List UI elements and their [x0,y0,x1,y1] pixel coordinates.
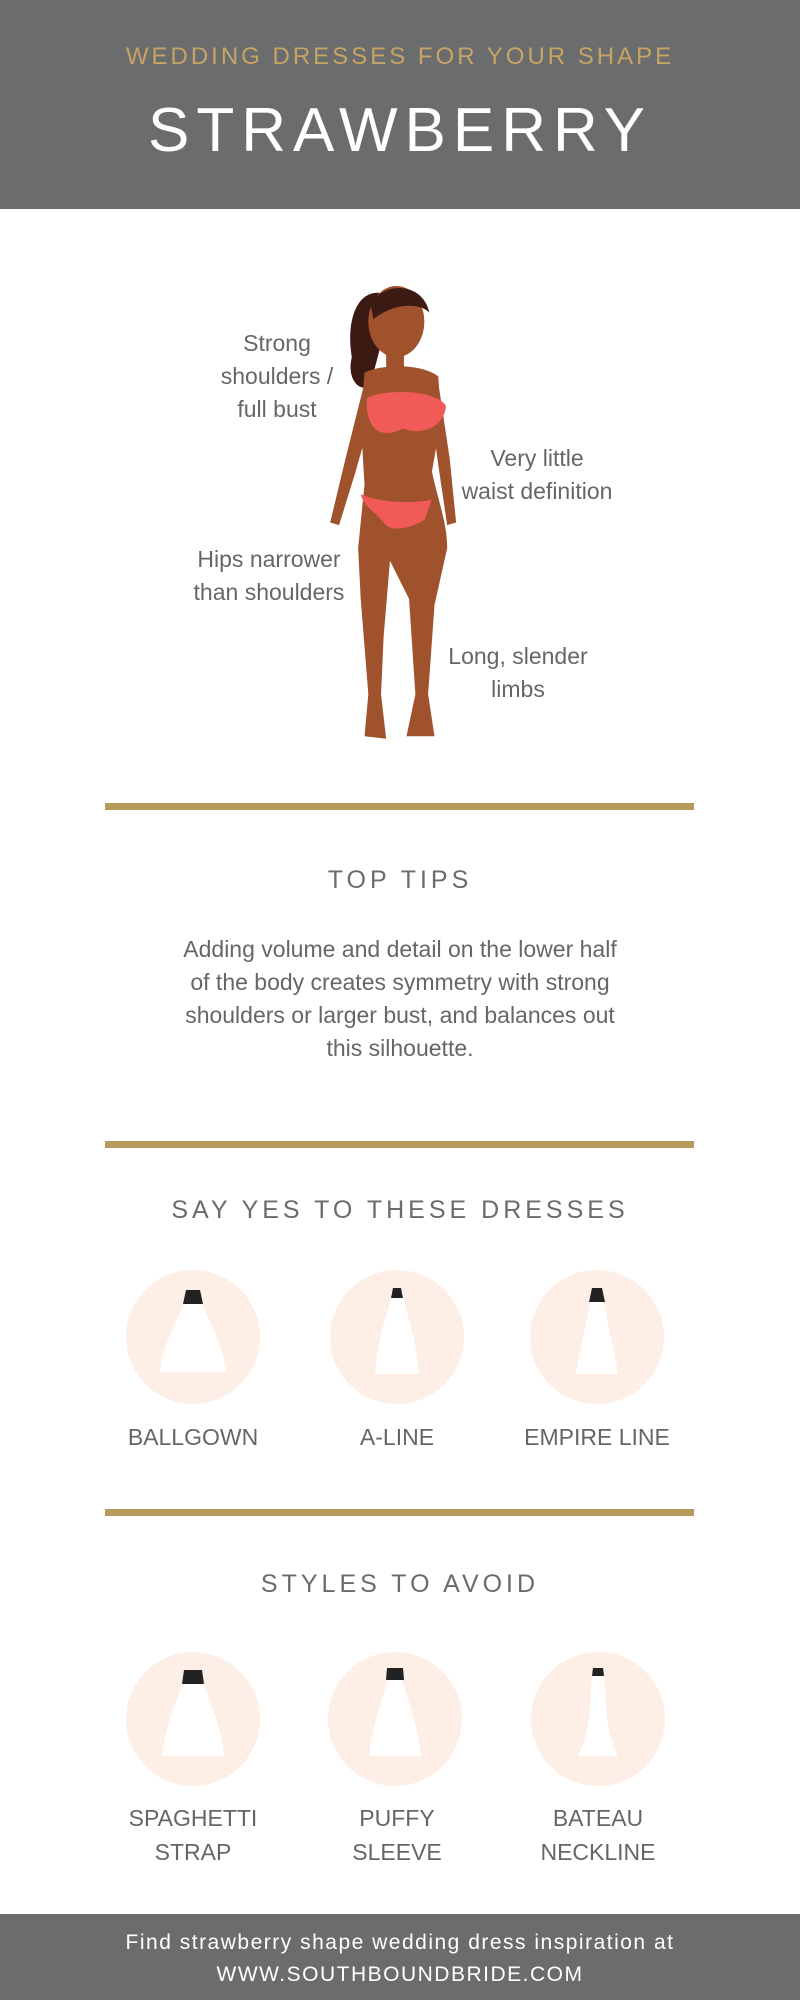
label: hips [194,546,344,605]
footer: Find strawberry shape wedding dress inspiration at [126,1931,674,1954]
label: limbs: Long, slender [448,643,588,669]
heading: top tips: TOP TIPS [328,866,472,894]
text: PUFFY [359,1805,435,1831]
subtitle: WEDDING DRESSES FOR YOUR SHAPE [126,43,674,70]
text: NECKLINE [540,1839,656,1865]
text: EMPIRE LINE [524,1424,670,1450]
header [0,0,800,209]
heading: say yes: SAY YES TO THESE DRESSES [171,1196,629,1224]
label: shoulders: Strong [243,330,311,356]
label: hips: than shoulders [194,579,344,605]
label: shoulders: shoulders / [221,363,333,389]
label: waist: Very little [490,445,584,471]
labels avoid [129,1805,257,1865]
label: waist [462,445,612,504]
dress: empire [530,1270,664,1404]
label: limbs: limbs [491,676,545,702]
text: SLEEVE [352,1839,442,1865]
dress: spaghetti [126,1652,260,1786]
label: waist: waist definition [462,478,612,504]
figure illustration [330,286,456,739]
dress: a-line [330,1270,464,1404]
labels avoid: STRAP [155,1839,231,1865]
label: hips: Hips narrower [197,546,341,572]
labels avoid: SPAGHETTI [129,1805,257,1831]
text: A-LINE [360,1424,434,1450]
footer: WWW.SOUTHBOUNDBRIDE.COM [216,1963,583,1986]
dress: puffy [328,1652,462,1786]
label: shoulders [221,330,334,422]
text: BATEAU [553,1805,643,1831]
tips text: Adding volume and detail on the lower half of the body creates symmetry with strong shoulders or larger bust, and balances out this silhouette. [183,936,617,1061]
labels say yes: BALLGOWN [128,1424,258,1450]
heading: avoid: STYLES TO AVOID [261,1570,539,1598]
footer [0,1914,800,2000]
label: shoulders: full bust [237,396,317,422]
label: limbs [448,643,588,702]
title: STRAWBERRY [148,96,652,165]
dress: bateau [531,1652,665,1786]
dress: ballgown [126,1270,260,1404]
